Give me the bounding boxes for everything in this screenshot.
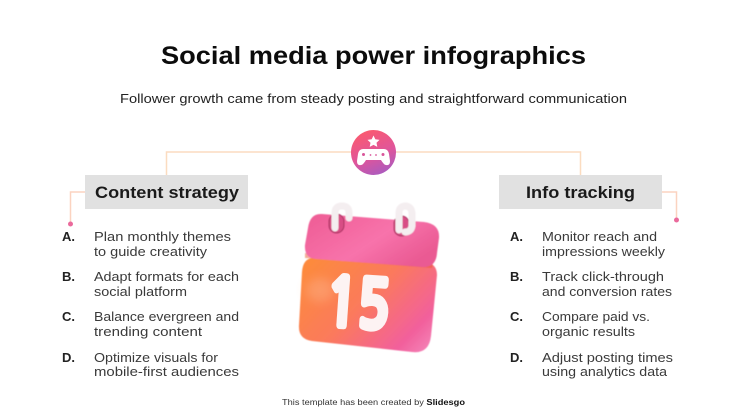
item D: Optimize visuals for: [94, 350, 219, 365]
item C: Compare paid vs.: [542, 309, 650, 324]
item D: mobile-first audiences: [94, 364, 240, 379]
panel: info tracking: [499, 175, 679, 379]
heading: info tracking: [499, 175, 662, 209]
list: content strategy: [62, 229, 240, 379]
heading: content strategy: [85, 175, 248, 209]
item C: [510, 309, 650, 339]
panel: content strategy: [62, 175, 248, 379]
title: Social media power infographics: [161, 42, 586, 70]
item B: Track click-through: [542, 269, 664, 284]
calendar number: 15: [324, 269, 392, 339]
item A: [510, 229, 666, 259]
item B: social platform: [94, 284, 187, 299]
subtitle: Follower growth came from steady posting and straightforward communication: [120, 91, 627, 106]
item A: [62, 229, 232, 259]
item D: [510, 350, 674, 379]
item B: [510, 269, 673, 299]
item C: trending content: [94, 324, 202, 339]
item A: Plan monthly themes: [94, 229, 232, 244]
item A: A.: [62, 230, 75, 244]
item D: using analytics data: [542, 364, 668, 379]
heading: content strategy: Content strategy: [95, 183, 240, 202]
item B: B.: [62, 270, 75, 284]
icon: game controller: [351, 130, 396, 175]
heading: info tracking: Info tracking: [526, 183, 635, 202]
item B: [62, 269, 239, 299]
item D: D.: [510, 351, 523, 365]
item C: C.: [62, 310, 75, 324]
item C: [62, 309, 239, 339]
item C: Balance evergreen and: [94, 309, 239, 324]
item A: to guide creativity: [94, 244, 208, 259]
item B: Adapt formats for each: [94, 269, 239, 284]
item B: B.: [510, 270, 523, 284]
item A: A.: [510, 230, 523, 244]
connector: top left: [166, 152, 352, 175]
item D: Adjust posting times: [542, 350, 674, 365]
item C: C.: [510, 310, 523, 324]
connector: top right: [396, 152, 580, 175]
footer credit: This template has been created by Slidesgo: [282, 397, 465, 407]
item A: impressions weekly: [542, 244, 666, 259]
item C: organic results: [542, 324, 636, 339]
icon: calendar: [299, 206, 439, 352]
connector and dot: content strategy: [68, 192, 85, 226]
item B: and conversion rates: [542, 284, 673, 299]
item D: [62, 350, 240, 379]
item D: D.: [62, 351, 75, 365]
calendar artwork: [299, 206, 439, 352]
list: info tracking: [510, 229, 674, 379]
connector and dot: info tracking: [662, 192, 679, 222]
item A: Monitor reach and: [542, 229, 657, 244]
